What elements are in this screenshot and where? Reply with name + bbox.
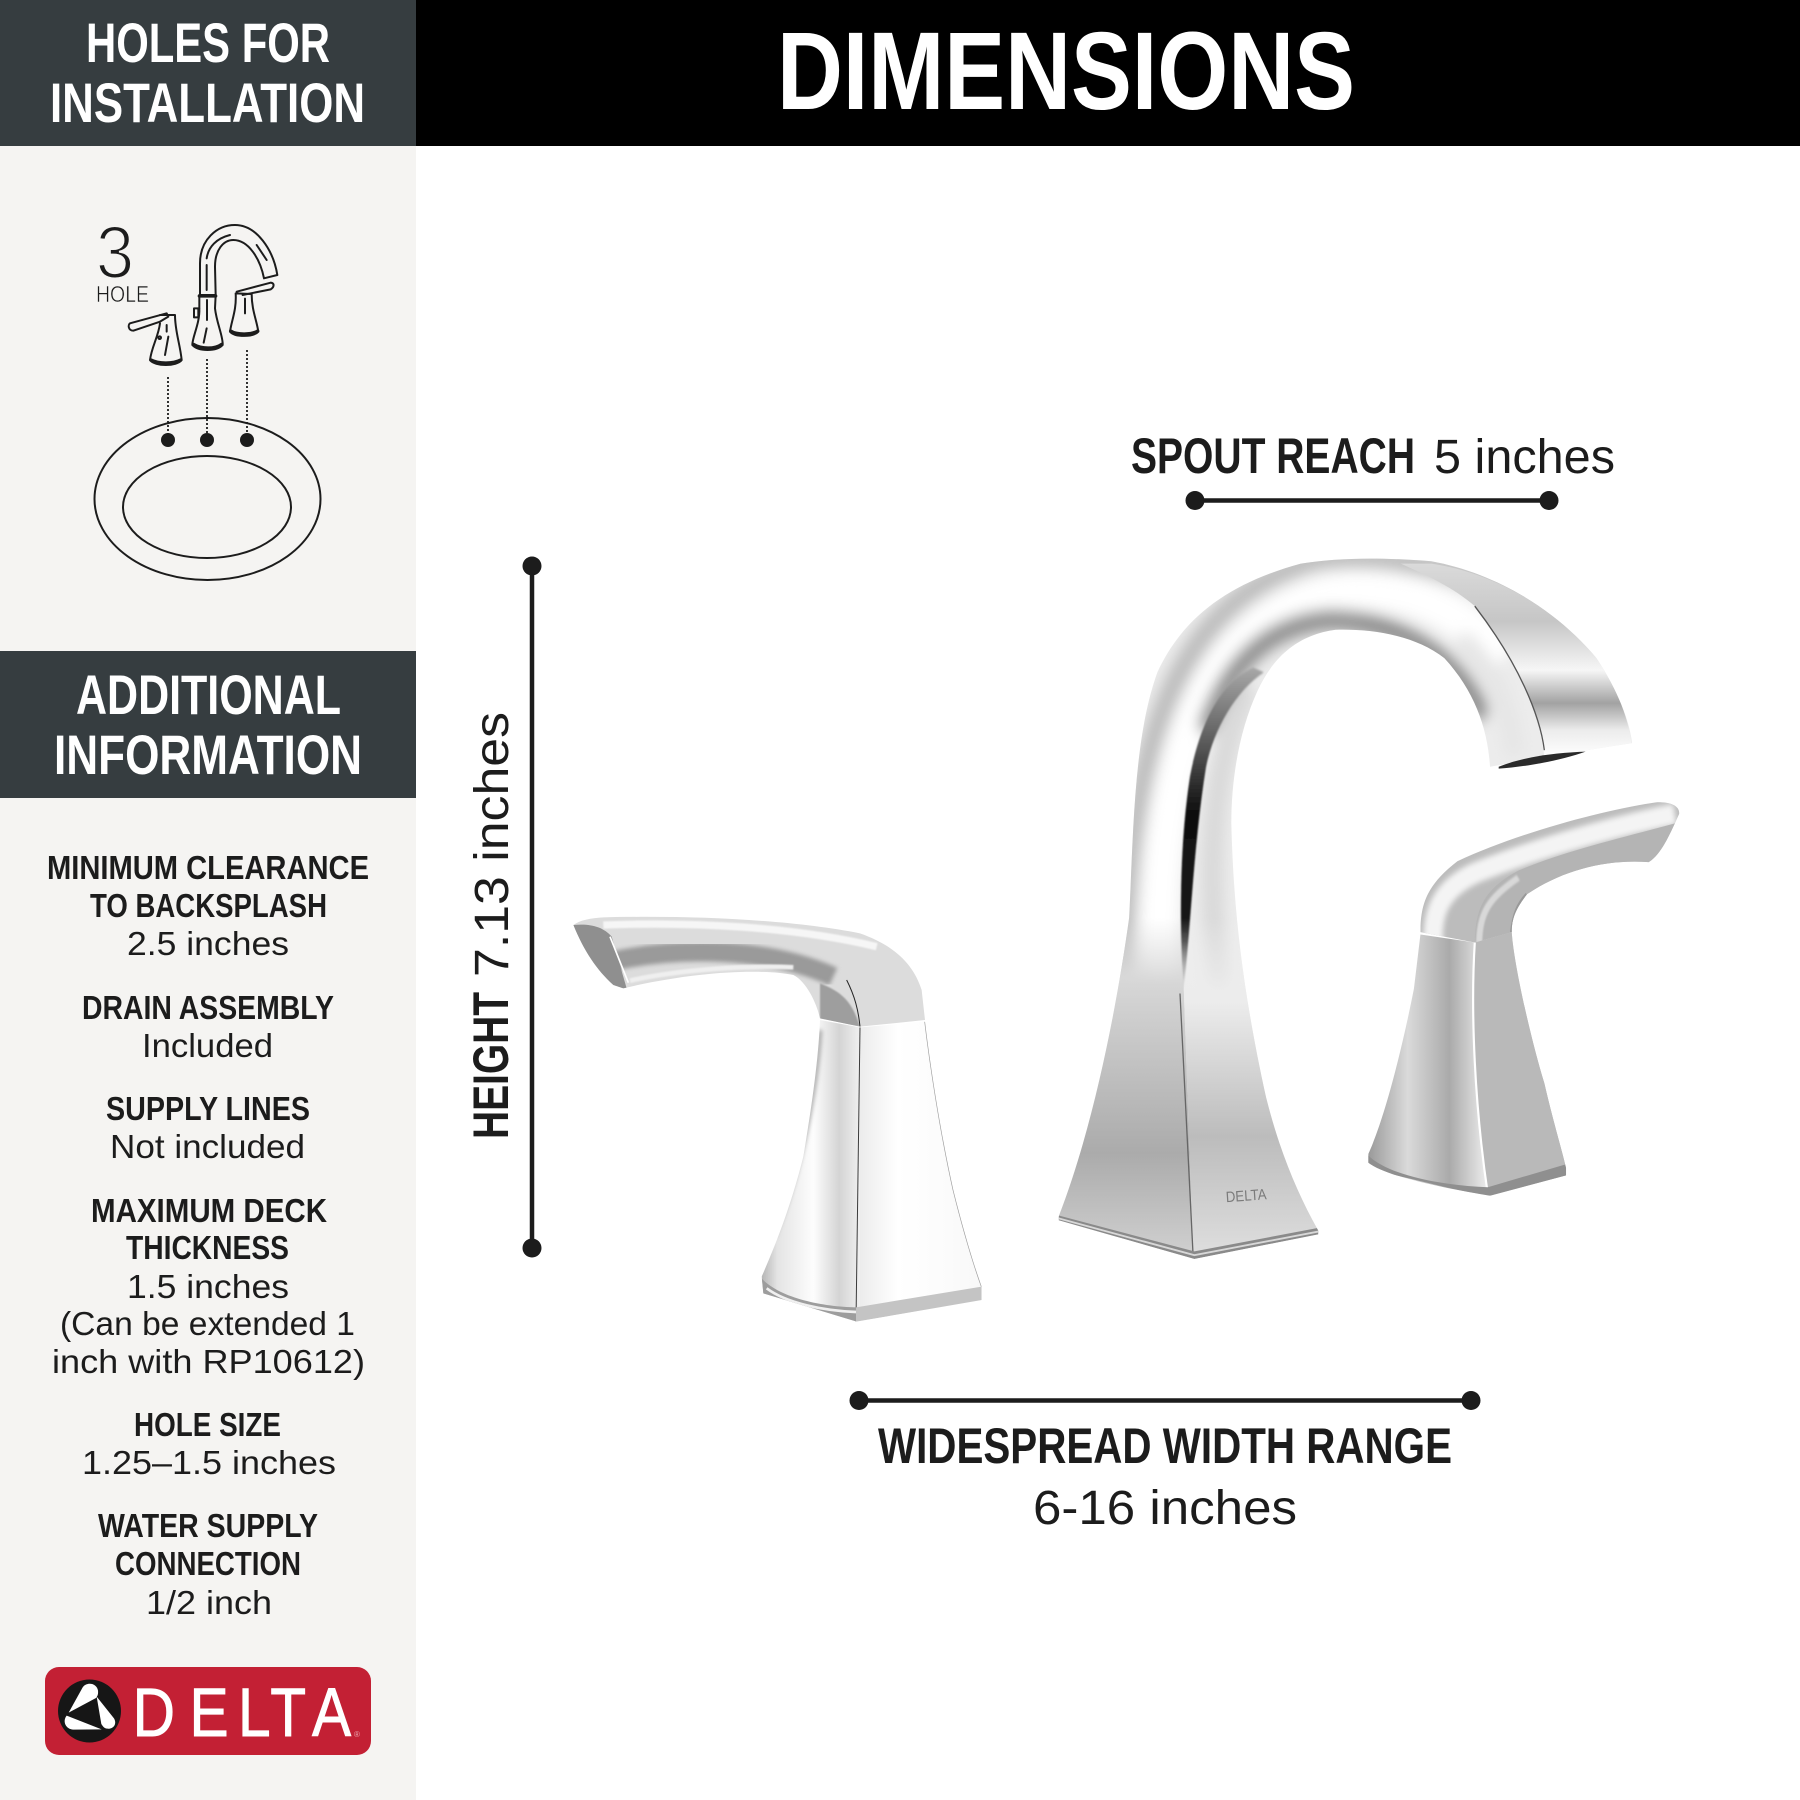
title: DIMENSIONS [777,10,1355,133]
icon: three hole sink diagram: HOLE [96,281,149,307]
delta logo: ® [354,1730,360,1739]
heading: holes for installation [0,0,416,146]
spec: minimum clearance [47,849,369,962]
spec: maximum deck thickness [52,1192,365,1380]
height label [463,712,519,1139]
spec: supply lines: Not included [110,1128,305,1165]
heading: additional information: INFORMATION [54,723,362,786]
spout reach label: SPOUT REACH [1131,428,1415,484]
heading: holes for installation: INSTALLATION [50,71,365,134]
heading: additional information: ADDITIONAL [76,663,341,726]
streak [1181,668,1264,989]
spec: supply lines [106,1090,310,1165]
faucet right handle [1362,795,1683,1201]
height dimension line [522,556,542,1258]
spec: minimum clearance: MINIMUM CLEARANCE [47,849,369,886]
engraved brand: DELTA [1225,1187,1267,1206]
spout reach label: 5 inches [1434,431,1615,484]
base edge [1059,1216,1318,1259]
heading: additional information [0,651,416,798]
aerator [1499,752,1586,769]
spec: hole size: HOLE SIZE [134,1406,281,1443]
heading: holes for installation: HOLES FOR [86,11,330,74]
width dimension line [850,1391,1480,1410]
title band: dimensions [416,0,1800,146]
width label [878,1418,1452,1535]
spec: water supply connection: 1/2 inch [146,1584,272,1621]
spec: maximum deck thickness: (Can be extended 1 [60,1305,355,1342]
width label: 6-16 inches [1033,1482,1297,1535]
delta logo [45,1667,371,1755]
spec: supply lines: SUPPLY LINES [106,1090,310,1127]
delta logo: DELTA [133,1674,351,1751]
icon: three hole sink diagram: 3 [96,211,134,294]
base right face [1181,918,1327,1254]
height label: HEIGHT [463,992,519,1139]
spec: maximum deck thickness: inch with RP10612) [52,1343,365,1380]
width label: WIDESPREAD WIDTH RANGE [878,1418,1452,1474]
spec: maximum deck thickness: THICKNESS [126,1229,289,1266]
spec: water supply connection: CONNECTION [115,1545,301,1582]
spec: drain assembly: DRAIN ASSEMBLY [82,989,334,1026]
icon: three hole sink diagram [94,211,320,580]
faucet left handle [570,913,987,1327]
faucet spout [1058,558,1632,1259]
spec: water supply connection [98,1507,318,1621]
spout tip [1401,564,1632,757]
spec: maximum deck thickness: MAXIMUM DECK [91,1192,327,1229]
spec: drain assembly [82,989,334,1064]
spec: minimum clearance: TO BACKSPLASH [90,887,327,924]
sidebar panel [0,0,416,1800]
spec: maximum deck thickness: 1.5 inches [127,1268,289,1305]
spec: drain assembly: Included [142,1027,273,1064]
spout reach dimension line [1186,491,1558,510]
spec: hole size [82,1406,336,1481]
base left face [1053,918,1193,1254]
spec: minimum clearance: 2.5 inches [127,925,289,962]
height label: 7.13 inches [466,712,519,977]
spec: hole size: 1.25–1.5 inches [82,1444,336,1481]
spec: water supply connection: WATER SUPPLY [98,1507,318,1544]
